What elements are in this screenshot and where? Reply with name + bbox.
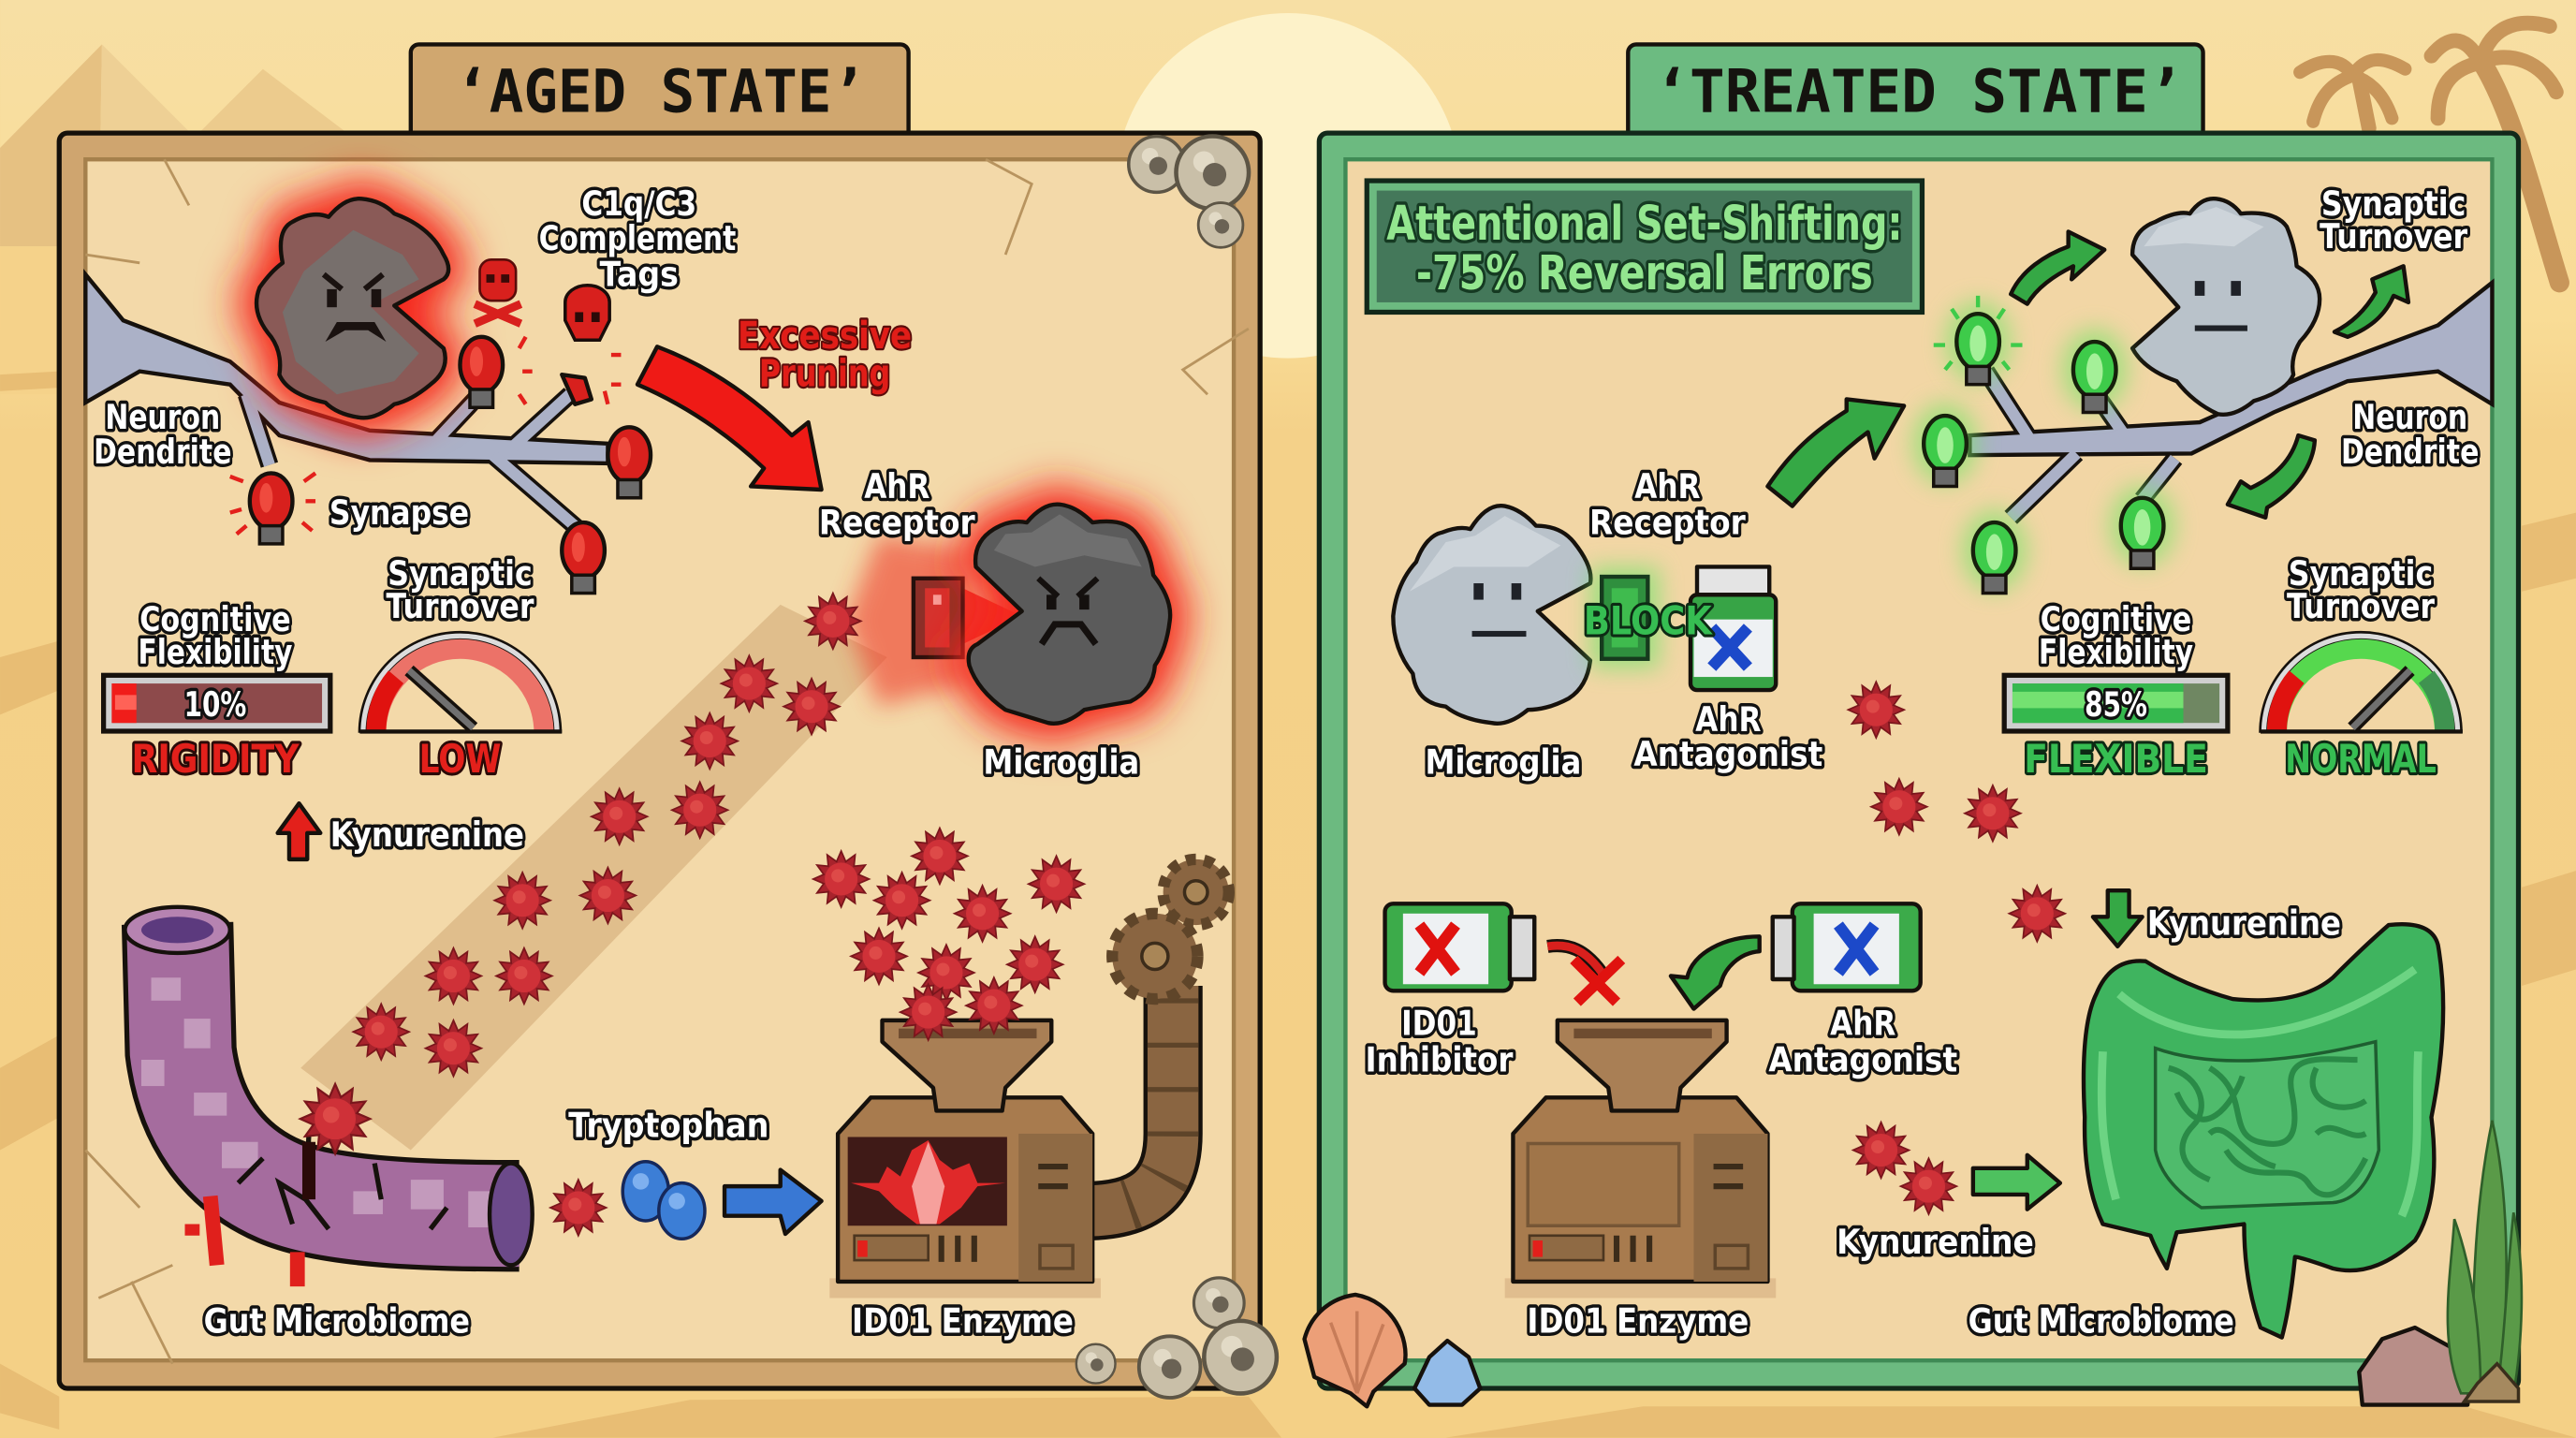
label: synaptic turnover gauge: Synaptic [2289,553,2433,594]
label: normal: NORMAL [2285,736,2437,782]
synapses: red [230,337,651,594]
kynurenine particles in tract [353,594,861,1077]
label: synaptic turnover top: Turnover [2320,216,2468,257]
gut: healthy [2084,924,2443,1338]
label: excessive pruning [738,314,912,395]
label: excessive pruning: Pruning [759,351,890,395]
label: neuron dendrite [2341,397,2479,472]
arrow: kynurenine to gut [1973,1155,2060,1210]
arrow: dendrite down [2228,435,2315,518]
label: kynurenine: Kynurenine [1837,1222,2034,1262]
gear: lower [1112,914,1197,999]
icon: blocked inhibitor arrow [1547,946,1621,1003]
ido1 enzyme machine: inhibited [1505,1020,1776,1298]
shell: blue [1414,1341,1480,1405]
arrow: synaptic turnover up [2334,266,2408,337]
rock: pink shell [2359,1328,2471,1405]
gear: upper [1164,859,1229,925]
bar: cognitive flexibility 85% [2004,675,2228,731]
palm trees [2300,23,2559,283]
callout: reversal errors [1367,181,1922,312]
kynurenine sparse [1848,682,2065,1214]
title: treated state: ‘TREATED STATE’ [1654,56,2183,125]
label: gut microbiome: Gut Microbiome [204,1300,470,1341]
value: 10%: 10% [184,684,246,725]
label: cognitive flexibility [2039,599,2193,672]
gut openings [124,907,230,953]
dunes [0,372,2576,1438]
label: cognitive flexibility: Flexibility [138,632,292,672]
arrow: tryptophan to enzyme [724,1170,822,1234]
label: ido1 enzyme: ID01 Enzyme [1527,1300,1749,1341]
label: ahr antagonist upper: AhR [1695,699,1761,740]
label: ido1 inhibitor: Inhibitor [1365,1039,1514,1079]
microglia: calm at receptor [1393,506,1590,724]
label: neuron dendrite: Dendrite [2341,432,2479,472]
gauge: synaptic turnover normal [2261,636,2463,734]
pipe and gears [1084,859,1229,1211]
kynurenine before tryptophan [550,1180,607,1236]
ido1 enzyme machine: active [829,1020,1101,1298]
damaged synapse [562,374,592,404]
needle [2352,670,2410,727]
bar: cognitive flexibility 10% [104,675,330,731]
title: aged state: ‘AGED STATE’ [455,56,866,125]
ahr receptor: blocked [1590,566,1660,668]
label: ahr antagonist lower [1768,1004,1957,1079]
kynurenine output above funnel [813,829,1084,1040]
barnacles: top right [1129,136,1249,247]
label: ido1 enzyme: ID01 Enzyme [852,1300,1074,1341]
label: ahr receptor: AhR [864,466,929,506]
label: neuron dendrite: Dendrite [94,432,232,472]
label: synaptic turnover [386,553,534,626]
seaweed [2448,1121,2522,1393]
gauge: synaptic turnover low [359,636,562,734]
tab: treated state [1628,44,2203,139]
kynurenine tract band [300,605,887,1151]
ahr receptor: red with glow [846,534,1022,707]
label: ido1 inhibitor: ID01 [1401,1004,1477,1044]
value: 85%: 85% [2085,684,2147,725]
microglia: calm top [2132,198,2320,415]
tab: aged state [411,44,909,139]
panel frame [1319,133,2519,1388]
callout: reversal errors: -75% Reversal Errors [1416,246,1873,301]
needle [409,670,474,727]
label: microglia: Microglia [983,742,1139,783]
arrow: antagonist to funnel [1671,936,1760,1009]
label: neuron dendrite: Neuron [105,397,220,437]
label: flexible: FLEXIBLE [2024,736,2208,782]
vial: ido1 inhibitor [1385,903,1534,990]
vial: ahr antagonist [1690,566,1776,690]
arrow: kynurenine up [278,803,320,859]
label: synaptic turnover top [2320,183,2468,257]
arrow: excessive pruning [637,346,822,490]
label: gut microbiome: Gut Microbiome [1969,1300,2234,1341]
label: rigidity: RIGIDITY [131,736,300,782]
molecule: tryptophan [622,1162,705,1239]
screen [848,1137,1007,1225]
rock: small [2465,1364,2519,1401]
icon: skull tag [565,286,609,340]
label: kynurenine down: Kynurenine [2147,903,2341,944]
label: neuron dendrite: Neuron [2352,397,2467,437]
microglia: angry top [256,198,448,418]
label: ahr receptor: Receptor [1589,502,1747,542]
label: ahr receptor: AhR [1634,466,1701,506]
panel: treated state [1305,133,2522,1406]
label: synaptic turnover: Synaptic [388,553,533,594]
neuron dendrite [85,274,607,529]
label: excessive pruning: Excessive [738,314,912,358]
arrow: kynurenine down [2093,890,2143,946]
vial: ahr antagonist horizontal [1773,903,1921,990]
label: neuron dendrite [94,397,232,472]
arrow: to microglia [2011,231,2104,304]
label: block: BLOCK [1584,597,1713,643]
sun [1116,13,1460,359]
small intestine folds [2169,1059,2365,1195]
label: cognitive flexibility [138,599,292,672]
barnacles: bottom right [1076,1278,1277,1398]
gut: damaged [124,907,533,1286]
label: synaptic turnover top: Synaptic [2321,183,2466,224]
label: ahr antagonist lower: Antagonist [1768,1039,1957,1079]
synapses: green [1912,296,2175,594]
label: microglia: Microglia [1426,742,1581,783]
label: synaptic turnover gauge [2287,553,2436,626]
label: cognitive flexibility: Cognitive [2041,599,2191,639]
label: ahr receptor [819,466,975,542]
label: ahr antagonist upper [1633,699,1822,774]
label: ahr receptor: Receptor [819,502,975,542]
label: low: LOW [419,736,501,782]
kynurenine leaking [300,1084,370,1153]
label: complement tags: Tags [600,254,679,294]
label: tryptophan: Tryptophan [568,1105,768,1145]
label: cognitive flexibility: Flexibility [2039,632,2193,672]
panel frame [59,133,1260,1388]
label: ahr antagonist lower: AhR [1830,1004,1895,1044]
label: synapse: Synapse [329,492,469,533]
shell: orange [1305,1295,1406,1406]
label: cognitive flexibility: Cognitive [139,599,291,639]
label: kynurenine up: Kynurenine [330,814,524,855]
label: ahr antagonist upper: Antagonist [1633,734,1822,774]
neuron dendrite: healthy [1969,283,2492,518]
label: complement tags: C1q/C3 [581,183,696,224]
panel: aged state [59,133,1277,1398]
arrow: up to dendrite [1767,399,1904,506]
microglia: angry at receptor [969,505,1170,724]
pyramids [0,44,345,394]
label: ahr receptor [1589,466,1747,542]
cracks [239,1134,446,1229]
label: synaptic turnover: Turnover [386,586,534,626]
label: ido1 inhibitor [1365,1004,1514,1079]
label: complement tags [539,183,736,294]
label: complement tags: Complement [539,218,736,258]
gut mottling [141,977,491,1227]
callout: reversal errors: Attentional Set-Shifting: [1386,197,1902,252]
icon: skull and crossbones [475,259,520,324]
blood [192,1196,298,1286]
label: synaptic turnover gauge: Turnover [2287,586,2436,626]
